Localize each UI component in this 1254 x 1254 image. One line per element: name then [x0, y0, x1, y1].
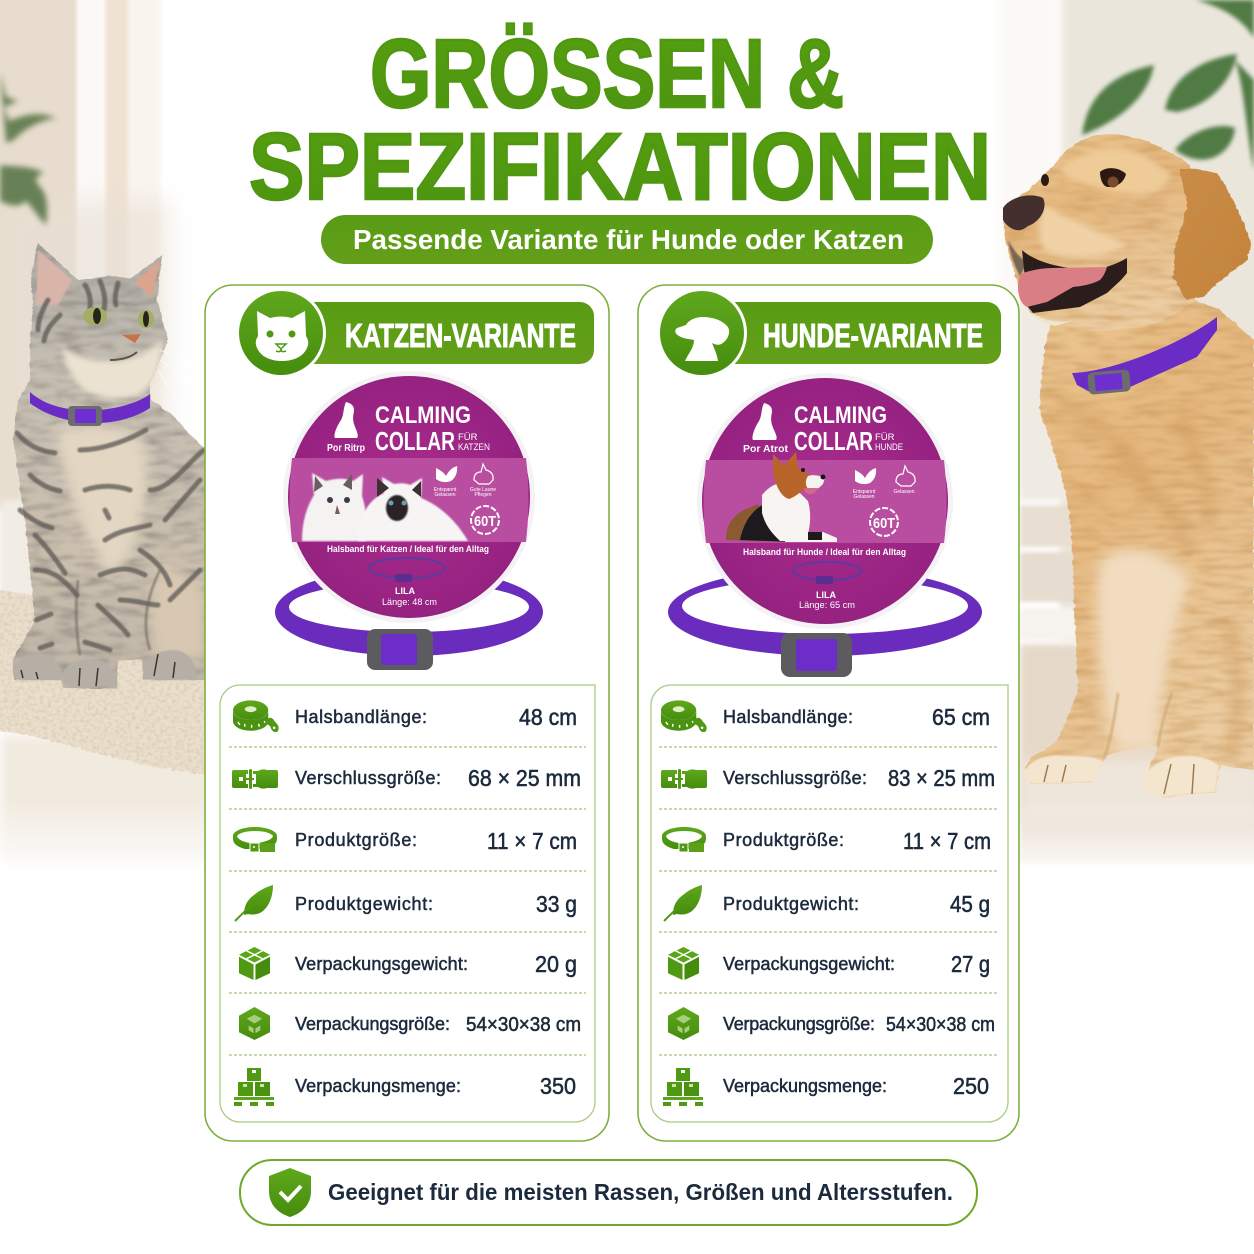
row: Halsbandlänge: Halsbandlänge:: [295, 707, 427, 727]
product: calming collar package for cats: LILA: [395, 586, 415, 596]
product: calming collar package for dogs: FÜR: [875, 432, 895, 443]
product: calming collar package for cats: Halsband für Katzen / Ideal für den Alltag: [327, 544, 489, 555]
product photo: two white cats: [302, 473, 468, 541]
row: Produktgröße: Produktgröße:: [295, 830, 417, 850]
product: calming collar package for dogs: [668, 373, 982, 677]
row: Verpackungsmenge: [663, 1068, 989, 1106]
panel: dog variant: [638, 285, 1019, 1141]
row: Halsbandlänge: 48 cm: [519, 704, 577, 730]
product: calming collar package for cats: Por Ritrp: [327, 443, 365, 454]
product: calming collar package for cats: KATZEN: [458, 442, 490, 453]
product: calming collar package for dogs: HUNDE: [875, 442, 903, 453]
product: calming collar package for dogs: LILA: [816, 590, 836, 600]
row: Produktgröße: Produktgröße:: [723, 830, 844, 850]
subtitle pill: [321, 215, 933, 264]
product photo: corgi: [726, 452, 837, 542]
row: Verschlussgröße: Verschlussgröße:: [723, 768, 867, 788]
panel header: Hunde-Variante: [657, 288, 1001, 378]
background plant left: [0, 72, 56, 225]
illustration: tabby cat with purple collar: [13, 243, 210, 688]
spec table: cat variant: [220, 685, 595, 1122]
row: Halsbandlänge: [661, 700, 990, 732]
row: Verpackungsgröße: 54×30×38 cm: [886, 1014, 995, 1036]
spec table: dog variant: [651, 685, 1008, 1122]
row: Produktgröße: 11 × 7 cm: [903, 828, 991, 854]
row: Produktgewicht: 33 g: [536, 891, 577, 917]
row: Verschlussgröße: Verschlussgröße:: [295, 768, 441, 788]
row: Verpackungsmenge: Verpackungsmenge:: [723, 1076, 887, 1096]
row: Verpackungsgröße: [668, 1007, 995, 1040]
paws: [13, 650, 197, 688]
row: Verpackungsmenge: 250: [953, 1073, 989, 1099]
product: calming collar package for cats: Pflegen: [475, 492, 492, 498]
row: Verpackungsgröße: 54×30×38 cm: [466, 1014, 581, 1036]
dog paws: [1024, 756, 1219, 797]
row: Verschlussgröße: 83 × 25 mm: [888, 765, 995, 791]
row: Produktgewicht: Produktgewicht:: [723, 894, 859, 914]
row: Verpackungsgewicht: 27 g: [951, 951, 990, 977]
product: calming collar package for cats: Gute Laune: [470, 487, 496, 493]
row: Produktgewicht: [235, 885, 577, 921]
illustration: golden retriever with purple collar: [1003, 134, 1254, 797]
panel header: Katzen-Variante: [236, 288, 594, 378]
product: calming collar package for dogs: Gelassen: [853, 494, 875, 500]
product: calming collar package for cats: FÜR: [458, 432, 478, 443]
title: SPEZIFIKATIONEN: [249, 114, 991, 220]
row: Produktgröße: [233, 827, 577, 854]
product: calming collar package for dogs: CALMING: [794, 402, 887, 429]
title: [249, 19, 991, 220]
row: Verpackungsgröße: Verpackungsgröße:: [723, 1014, 875, 1034]
panel header: Hunde-Variante: HUNDE-VARIANTE: [763, 317, 983, 354]
row: Produktgewicht: Produktgewicht:: [295, 894, 433, 914]
row: Halsbandlänge: [233, 700, 577, 732]
row: Produktgröße: 11 × 7 cm: [487, 828, 577, 854]
row: Produktgröße: [662, 827, 991, 854]
product: calming collar package for dogs: Länge: 65 cm: [799, 600, 855, 611]
panel: cat variant: [205, 285, 609, 1141]
floor and steps right: [1020, 505, 1080, 547]
dog head: [1003, 134, 1196, 331]
row: Verpackungsmenge: [234, 1068, 576, 1106]
row: Verpackungsmenge: 350: [540, 1073, 576, 1099]
product: calming collar package for dogs: Por Atrot: [743, 444, 789, 455]
row: Verpackungsgewicht: Verpackungsgewicht:: [295, 954, 468, 974]
row: Verpackungsmenge: Verpackungsmenge:: [295, 1076, 461, 1096]
icon: shield with check: [269, 1168, 311, 1217]
background plant right: [1082, 0, 1254, 170]
product: calming collar package for cats: [275, 371, 543, 670]
product: calming collar package for dogs: 60T: [873, 515, 895, 532]
product: calming collar package for cats: Länge: 48 cm: [382, 597, 437, 608]
product: calming collar package for cats: 60T: [474, 513, 496, 530]
panel header: Katzen-Variante: KATZEN-VARIANTE: [345, 317, 576, 354]
footer callout: Geeignet für die meisten Rassen, Größen und Altersstufen.: [328, 1179, 953, 1205]
row: Produktgewicht: 45 g: [950, 891, 990, 917]
row: Halsbandlänge: 65 cm: [932, 704, 990, 730]
product: calming collar package for dogs: Halsband für Hunde / Ideal für den Alltag: [743, 547, 906, 558]
row: Verpackungsgewicht: [239, 947, 577, 980]
product: calming collar package for dogs: Gelassen: [893, 489, 915, 495]
row: Verpackungsgewicht: 20 g: [535, 951, 577, 977]
product: calming collar package for cats: Entspannt: [434, 487, 457, 493]
row: Verschlussgröße: [232, 765, 581, 791]
row: Verschlussgröße: [661, 765, 995, 791]
subtitle pill: Passende Variante für Hunde oder Katzen: [353, 224, 904, 255]
product: calming collar package for cats: COLLAR: [375, 426, 455, 456]
row: Verschlussgröße: 68 × 25 mm: [468, 765, 581, 791]
row: Verpackungsgröße: [239, 1007, 581, 1040]
row: Verpackungsgröße: Verpackungsgröße:: [295, 1014, 450, 1034]
footer callout: [240, 1160, 977, 1225]
product: calming collar package for dogs: COLLAR: [794, 426, 873, 456]
row: Produktgewicht: [664, 885, 990, 921]
cat face: [83, 307, 107, 325]
title: GRÖSSEN &: [370, 19, 844, 128]
row: Verpackungsgewicht: Verpackungsgewicht:: [723, 954, 895, 974]
row: Halsbandlänge: Halsbandlänge:: [723, 707, 853, 727]
product: calming collar package for dogs: Entspannt: [853, 489, 876, 495]
product: calming collar package for cats: CALMING: [375, 402, 471, 429]
carpet: [0, 590, 215, 776]
product: calming collar package for cats: Gelassen: [434, 492, 456, 498]
row: Verpackungsgewicht: [668, 947, 990, 980]
